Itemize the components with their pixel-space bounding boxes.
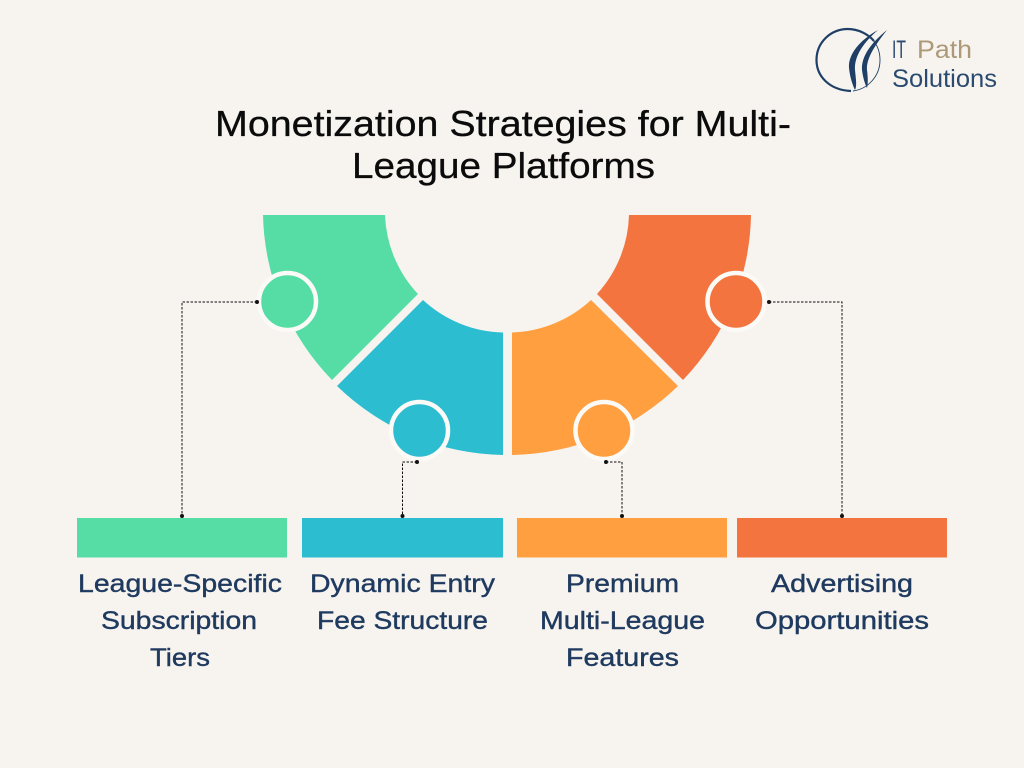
connector: orange node to bar — [604, 460, 624, 518]
label: Tiers — [150, 644, 210, 672]
segment: teal — [337, 300, 503, 455]
logo icon: circle with swooshes — [816, 29, 887, 91]
column: Advertising Opportunities — [737, 518, 947, 635]
segment: red-orange — [597, 215, 751, 380]
title — [215, 103, 791, 186]
label: League-Specific — [78, 570, 282, 598]
semicircle diagram — [259, 215, 764, 459]
label: Dynamic Entry — [310, 570, 496, 598]
title: League Platforms — [352, 145, 655, 186]
label: Fee Structure — [317, 607, 488, 635]
label: Premium — [566, 570, 679, 598]
segment: green — [263, 215, 418, 380]
node: red-orange — [708, 273, 764, 330]
logo text: IT — [892, 36, 906, 64]
bar: orange — [517, 518, 727, 558]
column: Premium Multi-League Features — [517, 518, 727, 672]
label — [755, 570, 929, 635]
logo: IT Path Solutions — [816, 29, 997, 93]
label — [78, 570, 282, 672]
node: orange — [576, 402, 632, 459]
logo: IT Path Solutions: Solutions — [892, 65, 997, 93]
label: Advertising — [771, 570, 913, 598]
connector: red-orange node to bar — [767, 300, 844, 518]
bar: green — [77, 518, 287, 558]
label: Multi-League — [540, 607, 705, 635]
label — [310, 570, 496, 635]
segment: orange — [512, 300, 678, 455]
bar: red-orange — [737, 518, 947, 558]
node: teal — [391, 402, 448, 459]
title: Monetization Strategies for Multi- — [215, 103, 791, 144]
node: green — [259, 273, 316, 330]
connector: green node to bar — [180, 300, 259, 518]
connector: teal node to bar — [400, 460, 419, 518]
column: League-Specific Subscription Tiers — [77, 518, 287, 672]
label: Opportunities — [755, 607, 929, 635]
label: Features — [566, 644, 679, 672]
logo: IT Path Solutions: Path — [917, 36, 972, 64]
label: Subscription — [101, 607, 257, 635]
column: Dynamic Entry Fee Structure — [302, 518, 503, 635]
bar: teal — [302, 518, 503, 558]
label — [540, 570, 705, 672]
